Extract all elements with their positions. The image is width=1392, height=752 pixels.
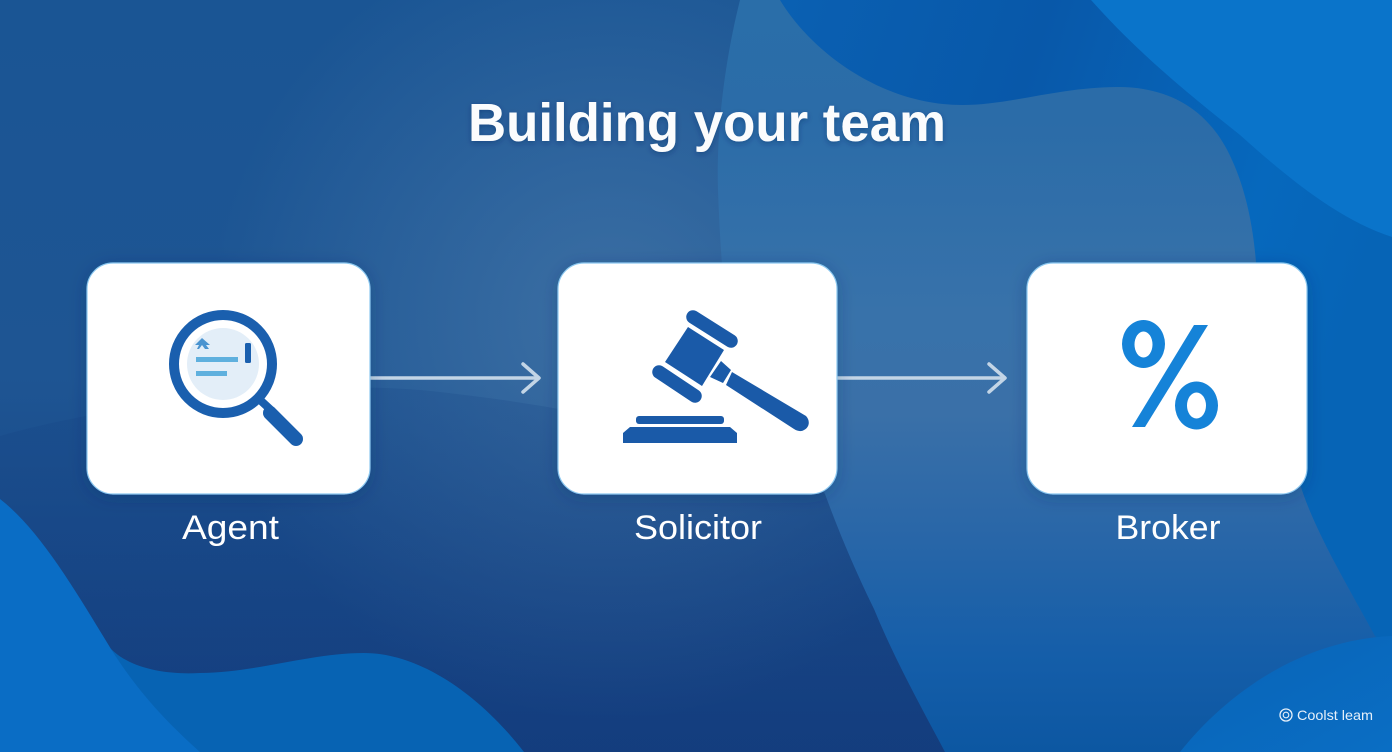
- panel: solicitor: [558, 263, 837, 547]
- icon: gavel: [623, 317, 809, 443]
- label: agent: Agent: [182, 509, 280, 547]
- icon: percent: [1122, 320, 1218, 430]
- label: solicitor: Solicitor: [634, 509, 762, 547]
- panel: broker: [1027, 263, 1307, 547]
- arrow: agent to solicitor: [370, 364, 539, 392]
- arrow: solicitor to broker: [837, 364, 1005, 392]
- icon: magnifying glass: [174, 315, 296, 439]
- panel: agent: [87, 263, 370, 547]
- watermark: Coolst leam: [1297, 707, 1373, 723]
- label: broker: Broker: [1116, 509, 1220, 547]
- title: Building your team: [468, 93, 946, 153]
